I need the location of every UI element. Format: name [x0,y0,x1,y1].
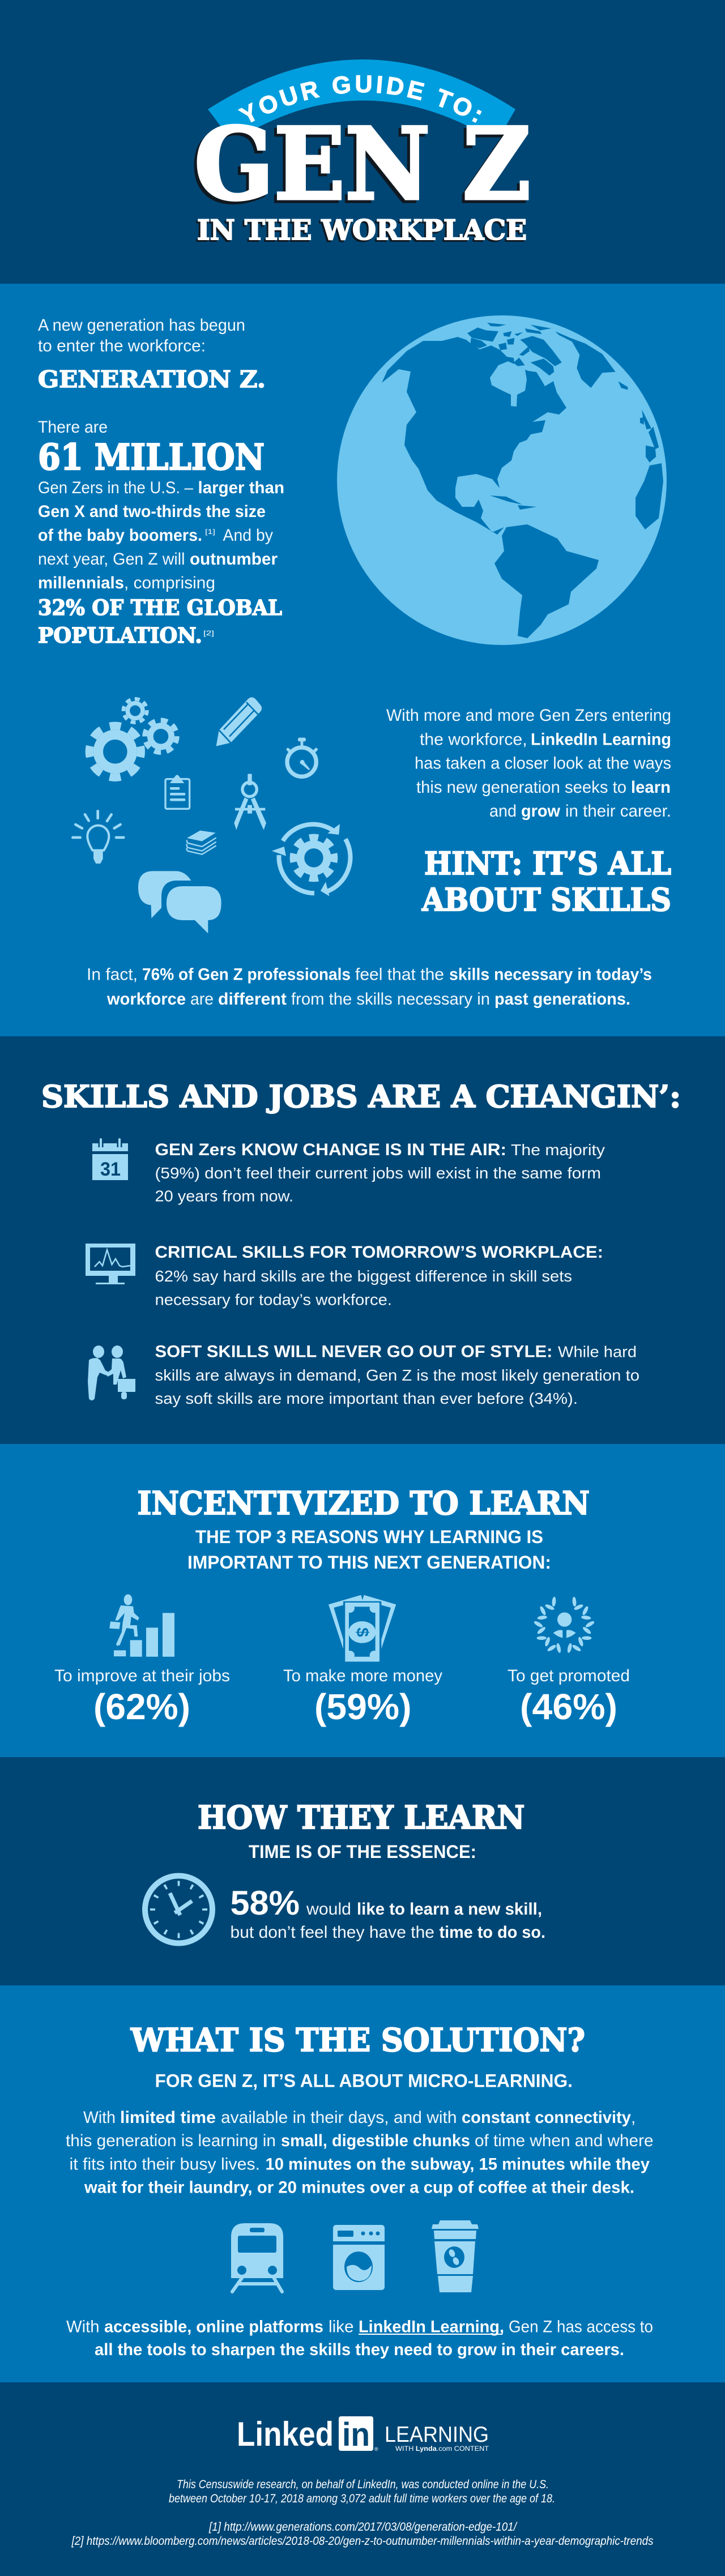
text: 76 percent statement: workforce [106,990,186,1009]
text: linkedin learning intro: learn [631,778,671,797]
intro text block: , comprising [124,574,215,592]
panel: skills and jobs [0,1036,725,1444]
globe [337,315,667,645]
text: solution paragraph: constant connectivity [462,2108,631,2127]
text: 76 percent statement: skills necessary in today’s [449,965,652,984]
text: solution paragraph: , [631,2108,636,2127]
text: solution paragraph: available in their days, and with [221,2108,457,2127]
subheading: time is of the essence: TIME IS OF THE ESSENCE: [249,1842,476,1862]
subheading: micro-learning: FOR GEN Z, IT’S ALL ABOUT MICRO-LEARNING. [155,2070,573,2091]
intro text block: next year, Gen Z will [38,550,185,569]
text: linkedin learning intro: has taken a closer look at the ways [415,754,671,772]
title: gen z: GEN Z [194,106,531,223]
intro text block: A new generation has begun [38,316,245,335]
heading: hint: ABOUT SKILLS [421,881,671,918]
text: linkedin learning intro: grow [521,802,561,821]
footnote: research method: between October 10-17, 2018 among 3,072 adult full time workers over the age of 18. [169,2492,555,2505]
stat: improve at jobs [54,1667,230,1727]
text: solution paragraph: of time when and where [475,2131,654,2150]
text: 58 percent: but don’t feel they have the [230,1923,434,1942]
intro text block: GENERATION Z. [38,366,266,393]
panel: generation z intro [0,284,725,1036]
text: 76 percent statement: past generations. [494,990,630,1009]
text: accessible platforms: With [66,2317,100,2336]
icon: train [231,2223,283,2292]
icon: climbing man [109,1594,174,1657]
text: critical skills: necessary for today’s workforce. [155,1291,392,1308]
intro text block: Gen X and two-thirds the size [38,502,266,521]
icon: calendar [92,1139,128,1180]
heading: how they learn: HOW THEY LEARN [198,1799,524,1836]
footnote: research method [169,2478,555,2505]
icon: money [329,1595,396,1661]
logo: linkedin learning: LEARNING [385,2423,489,2447]
heading: hint [421,845,671,918]
footnote: sources [71,2521,654,2548]
heading: what is the solution: WHAT IS THE SOLUTION? [130,2022,585,2059]
text: 58 percent: like to learn a new skill, [357,1900,542,1919]
icon: books [187,831,216,855]
banner arch: your guide to [208,59,515,127]
stat: get promoted: To get promoted [508,1667,630,1685]
logo: linkedin learning: in [342,2416,370,2453]
icon: large gear [89,726,141,778]
text: linkedin learning intro: and [489,802,517,821]
text: 58 percent: time to do so. [440,1923,545,1942]
stat: get promoted: (46%) [520,1686,617,1727]
icon: stopwatch [287,738,316,776]
text: change in the air: (59%) don’t feel their current jobs will exist in the same form [155,1164,601,1182]
intro text block: outnumber [190,550,278,569]
logo: linkedin learning [237,2415,489,2453]
text: change in the air: GEN Zers KNOW CHANGE IS IN THE AIR: [155,1140,506,1159]
intro text block: larger than [198,479,284,497]
text: soft skills: say soft skills are more important than ever before (34%). [155,1390,578,1407]
text: accessible platforms: LinkedIn Learning, [359,2317,504,2336]
icon: washing machine [333,2225,385,2290]
text: linkedin learning intro: the workforce, [420,730,527,749]
text: 76 percent statement: In fact, [87,965,138,984]
text: soft skills: skills are always in demand, Gen Z is the most likely generation to [155,1366,639,1384]
icon: clipboard [165,775,190,809]
subtitle: in the workplace: IN THE WORKPLACE [197,213,527,246]
text: 76 percent statement: feel that the [355,965,444,984]
intro text block: There are [38,418,108,437]
icon: drafting compass [234,774,266,830]
text: solution paragraph: With [83,2108,116,2127]
text: linkedin learning intro: in their career. [565,802,671,821]
intro text block: to enter the workforce: [38,336,206,356]
heading: skills and jobs: SKILLS AND JOBS ARE A CHANGIN’: [41,1079,681,1114]
text: solution paragraph: small, digestible chunks [281,2131,470,2150]
icon: calendar: 31 [100,1159,121,1180]
banner arch: your guide to: YOUR GUIDE TO: [238,75,481,123]
text: solution paragraph [66,2108,654,2197]
text: linkedin learning intro: this new generation seeks to [416,778,626,797]
intro text block: of the baby boomers. [38,526,202,545]
stat: make more money: To make more money [283,1667,442,1685]
intro text block: millennials [38,574,124,592]
text: solution paragraph: this generation is learning in [66,2131,276,2150]
icon: speech bubbles [138,871,221,933]
intro text block: POPULATION. [38,623,202,648]
intro text block: Gen Zers in the U.S. – [38,479,193,497]
icon: light bulb [72,811,123,864]
intro text block: And by [223,526,273,545]
icon: pencil [216,697,262,746]
panel: header [194,59,531,246]
subheading: top 3 reasons: IMPORTANT TO THIS NEXT GENERATION: [187,1552,551,1573]
text: 76 percent statement: different [218,990,287,1009]
text: change in the air [155,1140,605,1205]
text: critical skills [155,1243,603,1308]
stat: improve at jobs: (62%) [93,1686,190,1727]
panel: what is the solution [0,1985,725,2382]
text: accessible platforms: all the tools to sharpen the skills they need to grow in their careers. [95,2340,624,2359]
stat: get promoted [508,1667,630,1727]
panel: footer [0,2382,725,2576]
text: accessible platforms: accessible, online platforms [104,2317,323,2336]
icon: handshake [88,1345,135,1400]
intro text block: 61 MILLION [38,436,265,478]
icon: laurel wreath [533,1595,595,1657]
text: change in the air: 20 years from now. [155,1187,293,1205]
text: linkedin learning intro: With more and more Gen Zers entering [386,706,671,725]
icon: small gear [122,697,149,724]
logo: linkedin learning: Linked [237,2415,334,2453]
icons: skills cluster [72,697,351,933]
footnote: sources: [1] http://www.generations.com/2017/03/08/generation-edge-101/ [208,2521,518,2534]
stat: improve at jobs: To improve at their jobs [54,1667,230,1685]
text: accessible platforms [66,2317,653,2359]
text: 58 percent: would [306,1900,351,1919]
text: critical skills: 62% say hard skills are the biggest difference in skill sets [155,1267,572,1285]
icon: monitor [86,1244,135,1284]
icon: money: $ [353,1627,372,1637]
text: accessible platforms: like [329,2317,353,2336]
text: soft skills: SOFT SKILLS WILL NEVER GO OUT OF STYLE: [155,1342,553,1361]
panel: how they learn [0,1757,725,1985]
heading: hint: HINT: IT’S ALL [424,845,671,882]
text: solution paragraph: limited time [120,2108,216,2127]
text: 76 percent statement [87,965,652,1009]
intro text block: [1] [205,528,215,536]
text: 76 percent statement: from the skills necessary in [291,990,490,1009]
footnote: research method: This Censuswide research, on behalf of LinkedIn, was conducted online in the U.S. [177,2478,549,2491]
text: solution paragraph: 10 minutes on the subway, 15 minutes while they [265,2155,650,2173]
panel: incentivized to learn [0,1444,725,1757]
text: soft skills: While hard [558,1343,637,1360]
text: solution paragraph: wait for their laundry, or 20 minutes over a cup of coffee at their desk. [84,2178,634,2197]
stat: make more money: (59%) [314,1686,411,1727]
footnote: sources: [2] https://www.bloomberg.com/news/articles/2018-08-20/gen-z-to-outnumber-millennials-within-a-year-demographic-trends [71,2535,654,2548]
icon: medium gear [142,717,180,755]
text: 76 percent statement: are [190,990,214,1009]
text: 58 percent: 58% [230,1884,300,1922]
icon: coffee cup [432,2220,479,2292]
icon: rotating gear [272,824,351,896]
text: critical skills: CRITICAL SKILLS FOR TOMORROW’S WORKPLACE: [155,1243,603,1262]
intro text block: 32% OF THE GLOBAL [38,595,282,620]
stat: make more money [283,1667,442,1727]
text: 76 percent statement: 76% of Gen Z professionals [142,965,351,984]
text: linkedin learning intro [386,706,671,821]
text: solution paragraph: it fits into their busy lives. [69,2155,260,2173]
text: change in the air: The majority [511,1141,605,1159]
intro text block [38,316,284,648]
text: soft skills [155,1342,639,1407]
text: linkedin learning intro: LinkedIn Learning [531,730,671,749]
subheading: top 3 reasons [187,1527,551,1573]
text: accessible platforms: Gen Z has access to [509,2317,653,2336]
logo: linkedin learning: ® [374,2446,378,2452]
intro text block: [2] [203,629,214,637]
text: 58 percent [230,1884,545,1942]
heading: incentivized to learn: INCENTIVIZED TO LEARN [137,1485,590,1522]
logo: linkedin learning: WITH Lynda.com CONTENT [395,2445,489,2453]
subheading: top 3 reasons: THE TOP 3 REASONS WHY LEARNING IS [195,1527,543,1547]
icon: clock [145,1876,212,1943]
